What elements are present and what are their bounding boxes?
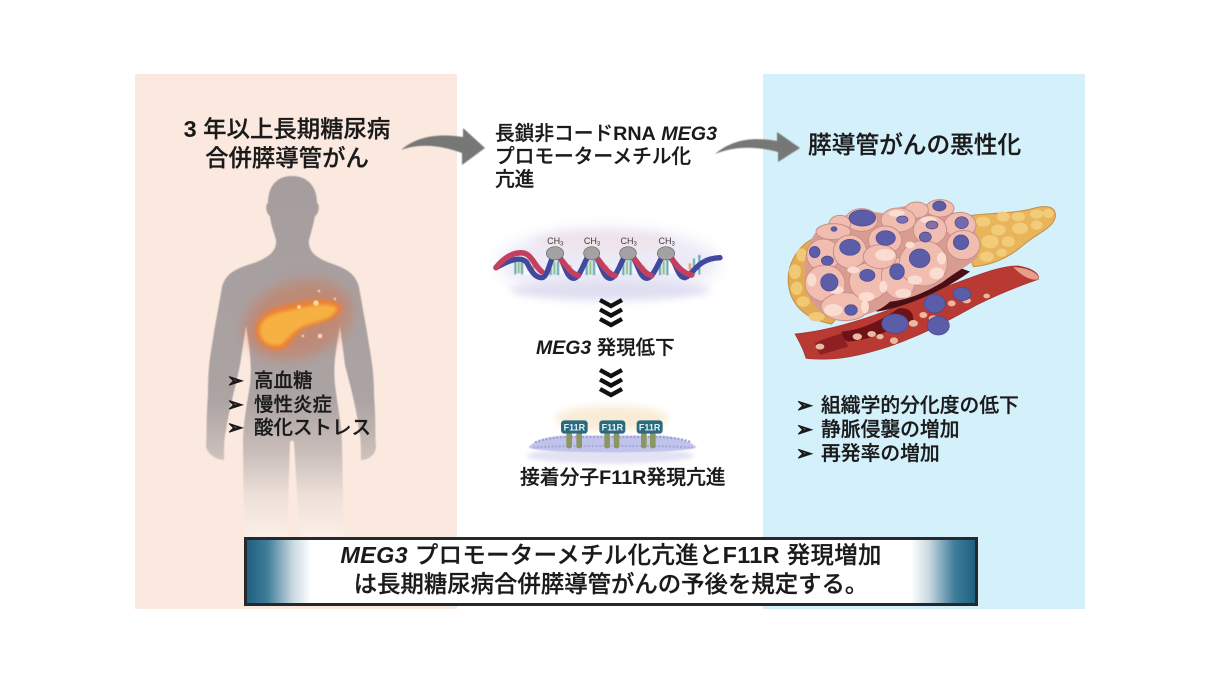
illustration: DNA with methylation: 3 xyxy=(560,242,564,248)
text: risk list: 酸化ストレス xyxy=(254,417,371,439)
icon: chevrons down 2 xyxy=(600,370,622,395)
text: risk list: 慢性炎症 xyxy=(254,394,332,416)
illustration: DNA with methylation: CH xyxy=(547,236,560,246)
title: right panel heading: 膵導管がんの悪性化 xyxy=(808,133,1021,159)
tumour mass xyxy=(805,204,979,318)
text: MEG3 downregulated: MEG3 発現低下 xyxy=(536,337,675,359)
text: F11R upregulated: 接着分子F11R発現亢進 xyxy=(520,467,726,489)
text: malignancy list: ➢ xyxy=(796,443,813,465)
text: risk list: ➢ xyxy=(227,370,243,392)
title: left panel heading: 合併膵導管がん xyxy=(205,145,369,171)
tumour cells xyxy=(805,200,980,321)
text: malignancy list xyxy=(796,394,1019,465)
icon: human body silhouette with glowing pancreas xyxy=(206,176,376,540)
illustration: DNA with methylation xyxy=(496,228,720,299)
nuclei xyxy=(809,201,971,335)
text: malignancy list: ➢ xyxy=(796,395,813,417)
title: left panel heading xyxy=(184,116,390,171)
icon: pancreas glow xyxy=(260,305,337,346)
illustration: DNA with methylation: CH xyxy=(659,236,671,246)
text: conclusion: MEG3 プロモーターメチル化亢進とF11R 発現増加 xyxy=(340,542,882,568)
text: middle heading: 長鎖非コードRNA MEG3 xyxy=(495,123,717,145)
title: left panel heading: 3 年以上長期糖尿病 xyxy=(184,116,390,142)
icon: chevrons down 1 xyxy=(600,300,622,325)
illustration: F11R membrane proteins: F11R xyxy=(602,423,624,433)
illustration: F11R membrane proteins xyxy=(527,406,697,464)
text: middle heading xyxy=(495,122,717,191)
text: risk list: 高血糖 xyxy=(254,370,313,392)
text: middle heading: 亢進 xyxy=(495,169,534,191)
illustration: DNA with methylation: 3 xyxy=(633,242,637,248)
illustration: pancreas with tumour and blood vessel xyxy=(788,200,1055,359)
illustration: DNA with methylation: CH xyxy=(621,236,633,246)
panel: right background xyxy=(763,74,1085,609)
text: malignancy list: 組織学的分化度の低下 xyxy=(821,395,1019,417)
arrow: middle to right xyxy=(715,132,800,162)
illustration: DNA with methylation: CH xyxy=(584,236,597,246)
text: malignancy list: ➢ xyxy=(796,419,813,441)
text: malignancy list: 静脈侵襲の増加 xyxy=(821,419,959,441)
illustration: DNA with methylation: 3 xyxy=(597,242,601,248)
double helix xyxy=(496,253,720,278)
pancreas head xyxy=(788,239,850,324)
vessel xyxy=(795,266,1039,359)
pancreas tail xyxy=(957,207,1055,267)
text: malignancy list: 再発率の増加 xyxy=(821,443,940,465)
text: risk list xyxy=(227,370,371,439)
methyl groups xyxy=(546,247,675,260)
text: conclusion xyxy=(340,542,882,597)
text: middle heading: プロモーターメチル化 xyxy=(495,146,691,168)
callout: bottom summary box xyxy=(246,538,976,604)
shadow under tumour xyxy=(870,267,970,312)
panel: left background xyxy=(135,74,457,609)
text: conclusion: は長期糖尿病合併膵導管がんの予後を規定する。 xyxy=(354,571,868,597)
illustration: F11R membrane proteins: F11R xyxy=(564,423,586,433)
text: risk list: ➢ xyxy=(227,394,243,416)
arrow: left to middle xyxy=(401,128,485,165)
text: risk list: ➢ xyxy=(227,417,243,439)
illustration: DNA with methylation: 3 xyxy=(671,242,675,248)
illustration: F11R membrane proteins: F11R xyxy=(639,423,661,433)
